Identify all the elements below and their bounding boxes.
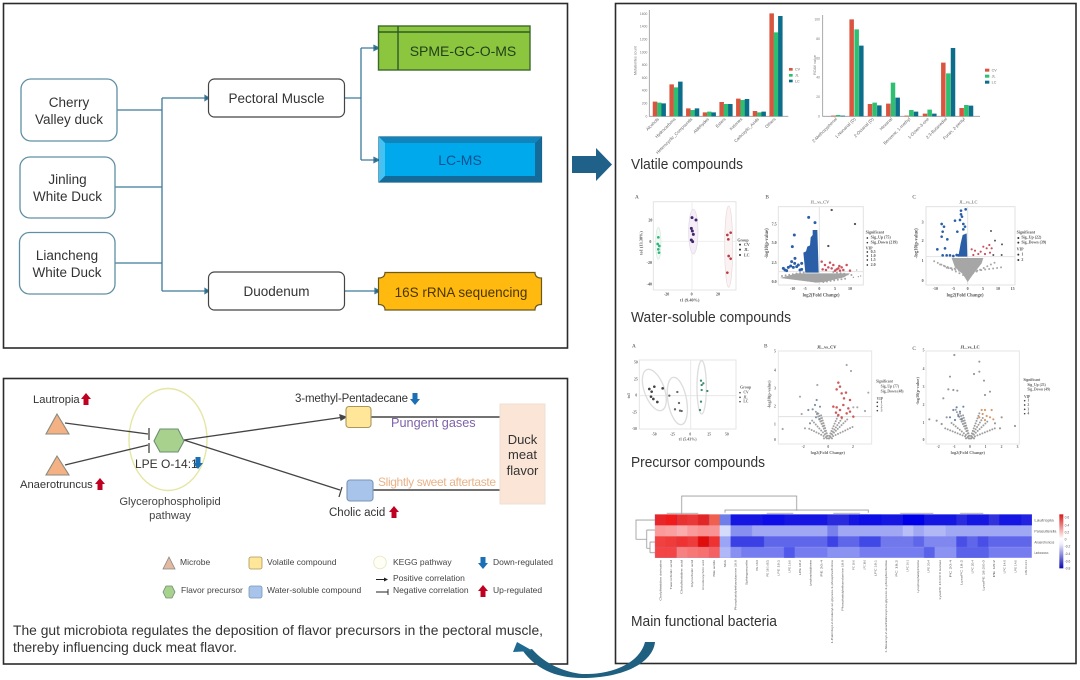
chart: volatile compound counts and ROAV bars: 2,3-Butanediol [925, 116, 948, 140]
chart: volatile compound counts and ROAV bars: 1200 [640, 37, 647, 41]
box: Liancheng White Duck [20, 232, 115, 294]
chart: precursor PCA and volcano plots: 3 [923, 385, 925, 389]
chart: precursor PCA and volcano plots: 5 [774, 350, 776, 354]
chart: water-soluble PCA and volcano plots: 2.5 [772, 260, 777, 265]
heading: Vlatile compounds: Vlatile compounds [631, 157, 743, 173]
legend: Negative correlation [393, 585, 469, 595]
column labels [659, 559, 1028, 653]
chart: volatile compound counts and ROAV bars: JL [795, 74, 799, 78]
chart: water-soluble PCA and volcano plots: 10 [996, 286, 1000, 291]
row labels [1034, 519, 1057, 555]
column labels: Lysophosphatidylserine [809, 560, 813, 586]
column labels: LPE O-14:1 [1024, 560, 1028, 575]
chart: precursor PCA and volcano plots: 0 [969, 445, 971, 449]
chart: precursor PCA and volcano plots: Sig_Down (48) [881, 389, 904, 393]
red block [655, 514, 731, 558]
chart: volatile compound counts and ROAV bars: 40 [816, 76, 820, 80]
chart: precursor PCA and volcano plots: log2(Fold Change) [811, 450, 845, 455]
chart: water-soluble PCA and volcano plots: Sig_Down (219) [871, 239, 898, 244]
chart: water-soluble PCA and volcano plots: Significant [866, 229, 885, 234]
column labels: LPE 14:0 [1013, 560, 1017, 573]
chart: water-soluble PCA and volcano plots: 1 [922, 258, 924, 263]
chart: volatile compound counts and ROAV bars: Esters [714, 117, 727, 129]
panel: experimental design [4, 4, 568, 348]
box: Pectoral Muscle [208, 79, 344, 117]
chart: precursor PCA and volcano plots: 1 [1027, 399, 1029, 403]
chart: water-soluble PCA and volcano plots: 0.5 [871, 249, 876, 254]
column labels: LysoPC 16:0/0:0 isomer [938, 560, 942, 599]
chart: water-soluble PCA and volcano plots: 2 [922, 238, 924, 243]
chart: precursor PCA and volcano plots: Sig_Down (49) [1027, 388, 1051, 392]
chart: volatile compound counts and ROAV bars: 80 [816, 37, 820, 41]
chart: correlation heatmap [636, 496, 1071, 653]
column labels: 1-Stearoyl-2-arachidonoyl-sn-glycero-3-phosphocholine [884, 560, 888, 653]
chart: precursor PCA and volcano plots: B [764, 343, 768, 349]
chart: precursor PCA and volcano plots: 2 [774, 404, 776, 408]
chart: precursor PCA and volcano plots: 2 [852, 445, 854, 449]
chart: volatile compound counts and ROAV bars: Carboxylic_Acids [733, 117, 760, 144]
chart: volatile compound counts and ROAV bars: Aldehydes [692, 117, 710, 134]
box: Duck meat flavor [500, 404, 545, 504]
chart: volatile compound counts and ROAV bars [634, 10, 997, 155]
column labels: PE 18:1 (9Z) [766, 560, 770, 577]
chart: water-soluble PCA and volcano plots: LC [744, 252, 750, 257]
chart: water-soluble PCA and volcano plots: 2.0 [871, 262, 876, 267]
arrow: results back to mechanism [513, 642, 655, 678]
column labels: LPC 16:1 [905, 560, 909, 572]
chart: water-soluble PCA and volcano plots: 0 [818, 286, 820, 291]
legend: Volatile compound [267, 557, 337, 567]
box: Pectoral Muscle: Pectoral Muscle [228, 91, 325, 106]
chart: water-soluble PCA and volcano plots: -5 [952, 286, 955, 291]
chart: precursor PCA and volcano plots: A [632, 344, 636, 350]
chart: water-soluble PCA and volcano plots: 5 [982, 286, 984, 291]
chart: water-soluble PCA and volcano plots: JL_vs_CV [811, 199, 830, 204]
box: 16S rRNA sequencing [378, 272, 542, 310]
panel: omics results [616, 4, 1076, 664]
chart: volatile compound counts and ROAV bars: Furan, 2-pentyl [942, 116, 966, 141]
column labels: LPC 18:0 [862, 560, 866, 570]
legend: KEGG pathway [393, 557, 452, 567]
chart: precursor PCA and volcano plots: 0 [689, 432, 691, 436]
icon: 3-methyl-Pentadecane volatile [295, 393, 420, 428]
chart: volatile compound counts and ROAV bars: 0 [645, 114, 647, 118]
column labels: SDA [723, 560, 727, 567]
chart: water-soluble PCA and volcano plots: log2(Fold Change) [803, 294, 840, 299]
box: LC-MS [379, 137, 542, 182]
chart: volatile compound counts and ROAV bars: 2-Methoxyphenol [811, 116, 838, 144]
chart: precursor PCA and volcano plots: -2 [802, 445, 805, 449]
icon: 3-methyl-Pentadecane volatile: 3-methyl-Pentadecane [295, 393, 408, 405]
column labels: 1-Palmitoyl-2-linoleoyl-sn-glycero-3-phosphocholine [830, 560, 834, 643]
column labels: Taurocholic acid [669, 560, 673, 589]
chart: volatile compound counts and ROAV bars: Ketones [729, 117, 743, 131]
chart: precursor PCA and volcano plots: 0 [827, 445, 829, 449]
column labels: Ursodeoxycholic acid [701, 560, 705, 590]
chart: precursor PCA and volcano plots: Sig_Up (77) [881, 384, 900, 388]
chart: water-soluble PCA and volcano plots: -20 [664, 291, 669, 296]
chart: water-soluble PCA and volcano plots: 10 [848, 286, 852, 291]
column labels: LPE 16:0 [787, 560, 791, 573]
chart: precursor PCA and volcano plots: 50 [634, 360, 638, 364]
row labels: Anaerotruncus [1034, 540, 1054, 544]
chart: water-soluble PCA and volcano plots: -10 [790, 286, 795, 291]
box: Jinling White Duck: White Duck [33, 189, 102, 204]
chart: precursor PCA and volcano plots: 4 [1027, 412, 1029, 416]
box: Cherry Valley duck: Valley duck [35, 112, 103, 127]
chart: water-soluble PCA and volcano plots: 0 [649, 239, 651, 244]
chart: correlation heatmap: 0.4 [1065, 523, 1069, 527]
KEGG pathway ellipse [129, 388, 207, 490]
column labels: LPE 18:1 [777, 560, 781, 576]
chart: precursor PCA and volcano plots: Significant [876, 380, 894, 384]
chart: precursor PCA and volcano plots: 2 [1027, 403, 1029, 407]
column labels: Cholylhistidine acid [680, 560, 684, 594]
chart: water-soluble PCA and volcano plots: 0 [922, 278, 924, 283]
chart: water-soluble PCA and volcano plots: 3 [922, 219, 924, 224]
chart: water-soluble PCA and volcano plots: 7.5 [772, 221, 777, 226]
chart: water-soluble PCA and volcano plots: 1.0 [871, 253, 876, 258]
legend [163, 556, 553, 598]
chart: precursor PCA and volcano plots: 0 [774, 438, 776, 442]
chart: volatile compound counts and ROAV bars: JL [992, 75, 996, 79]
chart: precursor PCA and volcano plots: 0 [635, 394, 637, 398]
chart: volatile compound counts and ROAV bars: ROAV value [813, 55, 817, 75]
column labels: Sphingomyelin [744, 560, 748, 585]
box: Duodenum: Duodenum [243, 284, 310, 299]
caption [13, 622, 543, 655]
chart: water-soluble PCA and volcano plots: t1 (9.40%) [680, 297, 700, 302]
label: Glycerophospholipid pathway: Glycerophospholipid [119, 496, 221, 508]
chart: water-soluble PCA and volcano plots: -log10(p-value) [914, 228, 919, 258]
chart: volatile compound counts and ROAV bars: 800 [642, 63, 647, 67]
chart: water-soluble PCA and volcano plots: 15 [1011, 286, 1015, 291]
label: Glycerophospholipid pathway: pathway [149, 510, 191, 522]
legend: Positive correlation [393, 573, 465, 583]
arrow: design to results [572, 148, 612, 181]
chart: precursor PCA and volcano plots: VIP [1024, 395, 1031, 399]
legend: Down-regulated [493, 557, 553, 567]
caption: thereby influencing duck meat flavor. [13, 639, 237, 655]
column labels: Phosphatidylethanolamine 16:0 [734, 560, 738, 610]
legend: Up-regulated [493, 585, 542, 595]
chart: correlation heatmap: 0 [1065, 538, 1067, 542]
chart: precursor PCA and volcano plots: -25 [670, 432, 675, 436]
chart: volatile compound counts and ROAV bars: 100 [814, 18, 820, 22]
panel: proposed mechanism [4, 378, 568, 664]
chart: volatile compound counts and ROAV bars: Alcohols [645, 117, 660, 132]
box: SPME-GC-O-MS [378, 26, 530, 70]
box: Liancheng White Duck: White Duck [32, 265, 102, 280]
chart: volatile compound counts and ROAV bars: 1600 [640, 12, 647, 16]
chart: water-soluble PCA and volcano plots: B [765, 195, 769, 201]
chart: water-soluble PCA and volcano plots: 0.0 [772, 279, 777, 284]
chart: precursor PCA and volcano plots: VIP [877, 397, 884, 401]
chart: precursor PCA and volcano plots: JL [743, 395, 748, 399]
chart: water-soluble PCA and volcano plots: -40 [647, 281, 652, 286]
connector lines from breeds to tissues [115, 46, 380, 294]
chart: precursor PCA and volcano plots: 1 [881, 400, 883, 404]
chart: precursor PCA and volcano plots: 50 [725, 432, 729, 436]
column labels: Glycocholic acid [690, 560, 694, 587]
column labels: LPE 18:2 [798, 560, 802, 575]
chart: volatile compound counts and ROAV bars: LC [992, 81, 997, 85]
chart: precursor PCA and volcano plots: log2(Fold Change) [951, 450, 985, 455]
chart: volatile compound counts and ROAV bars: 600 [642, 76, 647, 80]
interaction lines [65, 415, 500, 497]
chart: volatile compound counts and ROAV bars: 1-Nonanal (D) [834, 116, 857, 139]
box: LC-MS: LC-MS [438, 152, 482, 168]
chart: precursor PCA and volcano plots: 4 [923, 367, 925, 371]
chart: correlation heatmap: 0.6 [1065, 516, 1069, 520]
chart: water-soluble PCA and volcano plots: 20 [716, 291, 720, 296]
chart: volatile compound counts and ROAV bars: Hydrocarbons [654, 117, 677, 139]
chart: volatile compound counts and ROAV bars: 400 [642, 89, 647, 93]
chart: volatile compound counts and ROAV bars: 0 [818, 114, 820, 118]
chart: precursor PCA and volcano plots: -1 [953, 445, 956, 449]
chart: volatile compound counts and ROAV bars: 1000 [640, 50, 647, 54]
column labels: Phosphatidylethanolamine 18:0 [841, 560, 845, 611]
chart: correlation heatmap: 0.2 [1065, 531, 1069, 535]
legend: Water-soluble compound [267, 585, 361, 595]
chart: volatile compound counts and ROAV bars: Metabolites count [634, 46, 638, 75]
chart: precursor PCA and volcano plots: C [912, 346, 916, 352]
chart: water-soluble PCA and volcano plots: -5 [803, 286, 807, 291]
chart: water-soluble PCA and volcano plots: Sig_Up (22) [1021, 235, 1042, 240]
chart: precursor PCA and volcano plots: t1 (5.43%) [679, 437, 697, 442]
box: 16S rRNA sequencing: 16S rRNA sequencing [395, 285, 527, 300]
chart: precursor PCA and volcano plots: 25 [707, 432, 711, 436]
icon: Lautropia microbe: Lautropia [33, 394, 80, 406]
chart: volatile compound counts and ROAV bars: Heterocyclic_Compounds [655, 117, 693, 155]
chart: correlation heatmap: -0.4 [1065, 552, 1071, 556]
column labels: LysoPC 18:2 [960, 560, 964, 585]
column labels: Cholylhistidine derivative [659, 560, 663, 601]
chart: precursor PCA and volcano plots: -log10(p-value) [767, 380, 772, 408]
chart: water-soluble PCA and volcano plots: CV [744, 242, 750, 247]
legend: Microbe [180, 557, 211, 567]
chart: water-soluble PCA and volcano plots: C [912, 195, 916, 201]
icon: Cholic acid water-soluble: Cholic acid [329, 507, 385, 519]
icon: LPE flavor precursor: LPE O-14:1 [135, 457, 198, 471]
chart: correlation heatmap: -0.2 [1065, 545, 1071, 549]
box: SPME-GC-O-MS: SPME-GC-O-MS [410, 43, 516, 59]
chart: precursor PCA and volcano plots: 25 [634, 377, 638, 381]
chart: volatile compound counts and ROAV bars: CV [795, 68, 801, 72]
row labels: Parasutterella [1034, 530, 1057, 534]
chart: water-soluble PCA and volcano plots: Sig_Down (39) [1021, 239, 1047, 244]
chart: volatile compound counts and ROAV bars: Benzene, 1-methyl [882, 116, 911, 146]
chart: precursor PCA and volcano plots: 3 [774, 386, 776, 390]
column labels: PC 18:2 [895, 559, 899, 577]
column labels: PE 18:2 [992, 559, 996, 577]
chart: water-soluble PCA and volcano plots: Significant [1017, 229, 1036, 234]
chart: water-soluble PCA and volcano plots: Sig_Up (75) [871, 235, 891, 240]
chart: water-soluble PCA and volcano plots: A [635, 195, 639, 201]
chart: water-soluble PCA and volcano plots: to1 (13.30%) [639, 231, 644, 255]
chart: precursor PCA and volcano plots: -log10(p-value) [915, 377, 920, 405]
chart: precursor PCA and volcano plots: 4 [774, 368, 776, 372]
chart: water-soluble PCA and volcano plots: 1 [1021, 251, 1023, 256]
chart: water-soluble PCA and volcano plots: JL_vs_LC [959, 199, 977, 204]
box: Jinling White Duck: Jinling [48, 172, 87, 187]
chart: volatile compound counts and ROAV bars: 1-Octen-3-one [907, 116, 930, 140]
heading: Precursor compounds: Precursor compounds [631, 455, 765, 471]
cell variation [731, 514, 1032, 558]
chart: precursor PCA and volcano plots: Sig_Up (23) [1027, 383, 1046, 387]
chart: water-soluble PCA and volcano plots: log2(Fold Change) [947, 294, 984, 299]
row bases [655, 514, 1032, 525]
chart: precursor PCA and volcano plots: 1 [923, 421, 925, 425]
icon: Anaerotruncus microbe: Anaerotruncus [20, 479, 93, 491]
chart: precursor PCA and volcano plots: -25 [632, 410, 637, 414]
chart: water-soluble PCA and volcano plots: Group [737, 238, 749, 243]
chart: precursor PCA and volcano plots: 2 [923, 403, 925, 407]
chart: water-soluble PCA and volcano plots [635, 195, 1047, 302]
chart: precursor PCA and volcano plots: -50 [652, 432, 657, 436]
chart: precursor PCA and volcano plots: -50 [632, 427, 637, 431]
chart: volatile compound counts and ROAV bars: CV [992, 69, 997, 73]
chart: water-soluble PCA and volcano plots: -log10(p-value) [765, 228, 770, 258]
box: Liancheng White Duck: Liancheng [36, 248, 98, 263]
chart: precursor PCA and volcano plots: 3 [881, 409, 883, 413]
chart: precursor PCA and volcano plots: LC [743, 400, 749, 404]
row labels: Lautropia [1034, 519, 1055, 523]
label: Pungent gases: Pungent gases [391, 416, 476, 430]
chart: water-soluble PCA and volcano plots: 5.0 [772, 240, 777, 245]
chart: water-soluble PCA and volcano plots: 1.5 [871, 257, 876, 262]
column labels: LPE 20:4 [927, 560, 931, 573]
chart: precursor PCA and volcano plots: 3 [1017, 445, 1019, 449]
column labels: LPC 20:4 [970, 560, 974, 573]
dendrograms [636, 496, 983, 553]
chart: precursor PCA and volcano plots: 5 [923, 349, 925, 353]
chart: correlation heatmap: -0.6 [1065, 559, 1071, 563]
chart: precursor PCA and volcano plots: -2 [937, 445, 940, 449]
box: Jinling White Duck [20, 157, 115, 218]
column labels: LPC 18:1 [873, 560, 877, 576]
box: Duck meat flavor: meat [508, 447, 537, 462]
chart: water-soluble PCA and volcano plots: VIP [866, 245, 873, 250]
column labels: PE 20:4 [819, 559, 823, 577]
box: Cherry Valley duck: Cherry [49, 95, 89, 110]
chart: precursor PCA and volcano plots: 1 [985, 445, 987, 449]
box: Duck meat flavor: Duck [508, 432, 538, 447]
chart: water-soluble PCA and volcano plots: -20 [647, 260, 652, 265]
box: Cherry Valley duck [21, 79, 117, 141]
chart: precursor PCA and volcano plots: to1 [626, 393, 631, 398]
chart: precursor PCA and volcano plots: CV [743, 391, 749, 395]
heading: Main functional bacteria: Main functional bacteria [631, 614, 778, 630]
chart: water-soluble PCA and volcano plots: 0 [967, 286, 969, 291]
chart: volatile compound counts and ROAV bars: Others [764, 117, 777, 129]
chart: water-soluble PCA and volcano plots: 0 [691, 291, 693, 296]
chart: precursor PCA and volcano plots: JL_vs_CV [817, 345, 837, 350]
chart: volatile compound counts and ROAV bars: 60 [816, 56, 820, 60]
colour scale [1059, 514, 1063, 568]
column labels: Lysophosphatidylcholine [916, 560, 920, 593]
heading: Water-soluble compounds: Water-soluble compounds [631, 310, 791, 326]
chart: precursor PCA and volcano plots: Group [740, 385, 752, 390]
chart: volatile compound counts and ROAV bars: LC [795, 79, 800, 83]
chart: volatile compound counts and ROAV bars: 20 [816, 95, 820, 99]
chart: precursor PCA and volcano plots: Significant [1023, 378, 1041, 382]
chart: correlation heatmap: -0.8 [1065, 566, 1071, 570]
chart: water-soluble PCA and volcano plots: 20 [648, 217, 652, 222]
chart: volatile compound counts and ROAV bars: 200 [642, 102, 647, 106]
chart: water-soluble PCA and volcano plots: VIP [1017, 247, 1024, 252]
column labels: LPC 14:0 [1003, 560, 1007, 573]
box: Duck meat flavor: flavor [507, 463, 539, 478]
chart: precursor PCA and volcano plots: 2 [881, 404, 883, 408]
chart: water-soluble PCA and volcano plots: 5 [834, 286, 836, 291]
icon: Lautropia microbe [33, 393, 91, 434]
row labels: Lactococcus [1034, 551, 1048, 555]
chart: precursor PCA and volcano plots [626, 343, 1051, 455]
chart: precursor PCA and volcano plots: 1 [774, 422, 776, 426]
column labels: LysoPE 18:2/0:0 [981, 560, 985, 591]
chart: precursor PCA and volcano plots: 3 [1027, 407, 1029, 411]
chart: water-soluble PCA and volcano plots: JL [744, 247, 749, 252]
column labels: PC 20:4 [949, 559, 953, 577]
box: Duodenum [208, 272, 344, 310]
chart: volatile compound counts and ROAV bars: 1400 [640, 25, 647, 29]
column labels: PE 16:0 [755, 560, 759, 571]
chart: volatile compound counts and ROAV bars: Hexanal [879, 116, 893, 131]
chart: precursor PCA and volcano plots: 0 [923, 438, 925, 442]
chart: precursor PCA and volcano plots: JL_vs_LC [960, 345, 980, 350]
chart: volatile compound counts and ROAV bars: 2-Octanal (D) [853, 116, 875, 138]
column labels: PC 16:0 [852, 560, 856, 570]
chart: water-soluble PCA and volcano plots: -10 [933, 286, 938, 291]
chart: precursor PCA and volcano plots: 2 [1001, 445, 1003, 449]
caption: The gut microbiota regulates the deposition of flavor precursors in the pectoral muscle, [13, 622, 543, 638]
legend: Flavor precursor [181, 585, 243, 595]
chart: water-soluble PCA and volcano plots: 2 [1021, 257, 1023, 262]
icon: Cholic acid water-soluble [329, 480, 399, 519]
icon: LPE flavor precursor [135, 429, 203, 471]
label: Slightly sweet aftertaste: Slightly sweet aftertaste [378, 475, 496, 489]
icon: Anaerotruncus microbe [20, 456, 105, 491]
column labels: Bile acids [712, 559, 716, 577]
